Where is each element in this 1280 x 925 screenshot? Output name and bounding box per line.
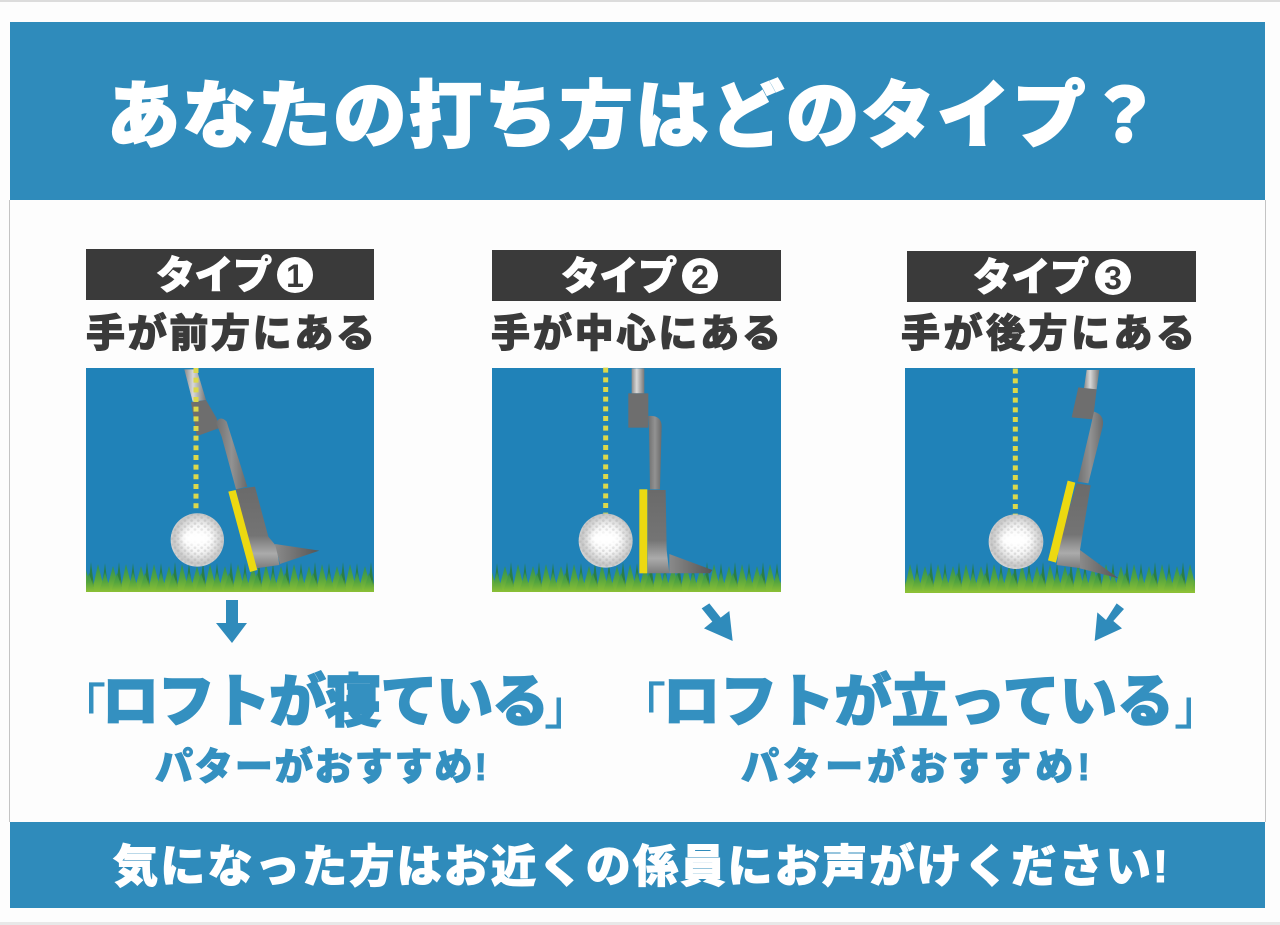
type 2 subtitle: 手が中心にある xyxy=(491,312,781,356)
footer text: 気になった方はお近くの係員にお声がけください! xyxy=(113,841,1168,892)
recommendation: putter: パターがおすすめ! xyxy=(155,746,487,789)
heading: loft standing: 」 xyxy=(1174,682,1222,735)
type 3 header bar: タイプ xyxy=(973,257,1089,300)
type 1 header bar: タイプ xyxy=(156,255,272,298)
heading: loft lying: 」 xyxy=(544,682,592,735)
arrow: down left xyxy=(1095,603,1124,641)
type 1 subtitle: 手が前方にある xyxy=(86,312,375,356)
type 2 illustration xyxy=(492,368,781,592)
heading: loft lying: ロフトが寝ている xyxy=(102,670,549,734)
result: loft standing xyxy=(618,670,1222,789)
type 2 header bar xyxy=(492,250,781,301)
type 3 subtitle: 手が後方にある xyxy=(901,312,1195,356)
type 3 header bar: 3 xyxy=(1104,260,1122,296)
arrow: down right xyxy=(702,603,733,641)
heading: loft lying: 「 xyxy=(58,681,106,734)
type 3 illustration xyxy=(905,368,1195,593)
column: type 3 xyxy=(901,251,1196,641)
result: loft lying xyxy=(58,670,592,789)
heading: loft standing: 「 xyxy=(618,680,666,733)
footer banner xyxy=(10,822,1265,908)
column: type 1 xyxy=(86,249,375,643)
type 3 header bar xyxy=(907,251,1196,302)
recommendation: putter: パターがおすすめ! xyxy=(741,746,1090,789)
type 2 header bar: タイプ xyxy=(561,256,677,299)
type 1 header bar: 1 xyxy=(286,258,304,294)
title banner xyxy=(10,22,1265,200)
type 1 header bar xyxy=(86,249,374,300)
type 2 header bar: 2 xyxy=(691,259,709,295)
column: type 2 xyxy=(491,250,781,641)
arrow: down xyxy=(216,600,247,643)
type 1 illustration xyxy=(86,368,374,592)
title: あなたの打ち方はどのタイプ？ xyxy=(107,76,1161,157)
heading: loft standing: ロフトが立っている xyxy=(663,670,1174,734)
